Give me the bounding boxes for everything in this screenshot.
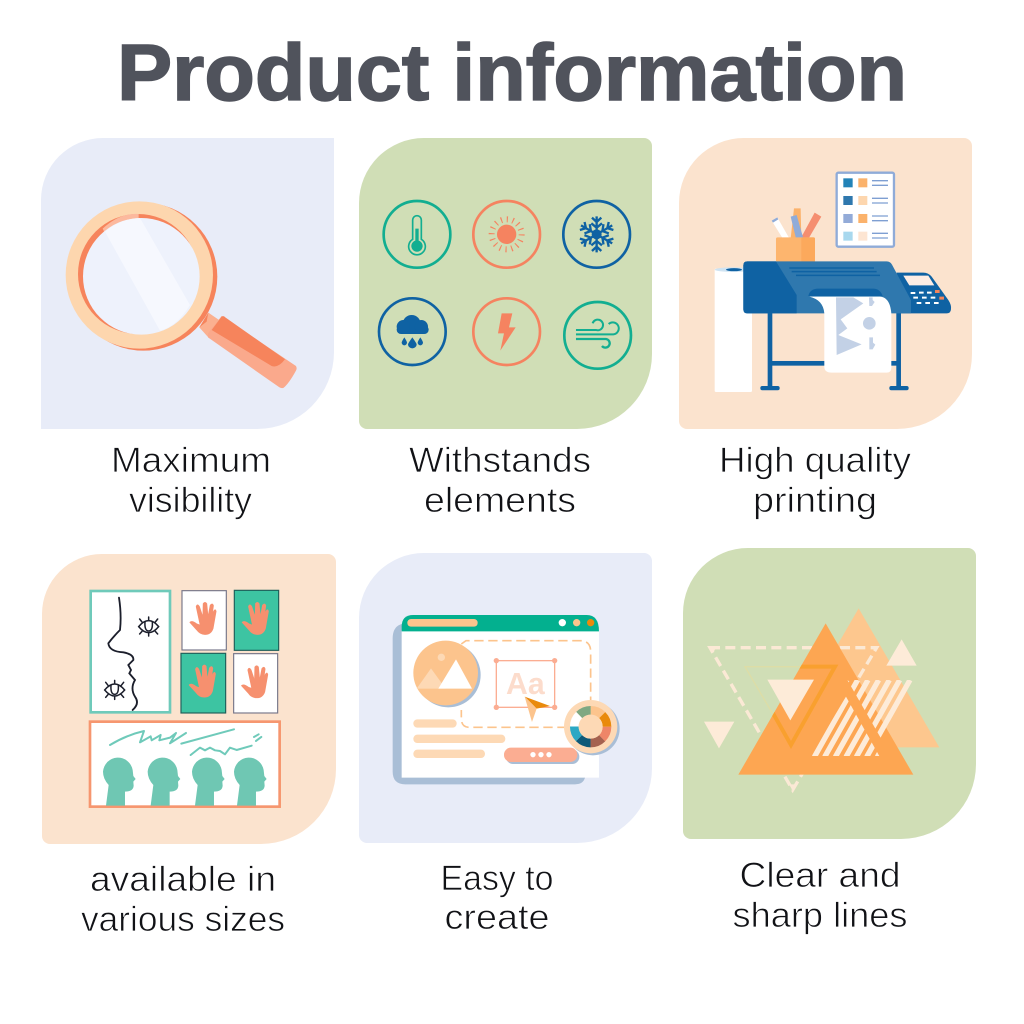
cursor xyxy=(525,697,550,722)
label: high quality printing xyxy=(719,441,912,520)
panel: available in various sizes xyxy=(42,554,336,844)
illustration: poster collection xyxy=(90,590,280,807)
label: clear and sharp lines: Clear and xyxy=(740,856,900,895)
colour wheel xyxy=(564,700,620,755)
label: easy to create xyxy=(440,859,554,937)
poster: face profile xyxy=(91,591,170,712)
panel: withstands elements xyxy=(359,138,652,429)
icon: lightning bolt xyxy=(473,298,540,365)
text lines xyxy=(413,719,505,758)
dashed triangle xyxy=(710,648,877,790)
printer stand xyxy=(760,310,909,390)
printed sheet xyxy=(809,297,891,373)
orange outline triangle xyxy=(772,664,838,749)
icon: magnifying glass xyxy=(66,201,297,388)
image thumbnail xyxy=(413,641,481,707)
label: maximum visibility xyxy=(111,441,271,520)
white dashed overlay xyxy=(840,648,877,678)
text box Aa: Aa xyxy=(506,667,546,701)
text box Aa xyxy=(494,658,557,710)
label: easy to create: Easy to xyxy=(440,859,554,898)
panel: high quality printing xyxy=(679,138,972,429)
label: maximum visibility: visibility xyxy=(129,481,253,520)
label: maximum visibility: Maximum xyxy=(111,441,271,480)
label: high quality printing: High quality xyxy=(719,441,912,480)
panel background: withstands elements xyxy=(359,138,652,429)
banner: heads xyxy=(90,722,280,807)
label: clear and sharp lines: sharp lines xyxy=(732,896,908,935)
main triangle xyxy=(738,623,913,775)
panel background: clear and sharp lines xyxy=(683,548,976,839)
label: easy to create: create xyxy=(444,898,550,937)
label: available in various sizes: various sizes xyxy=(81,900,285,939)
pencil cup xyxy=(772,208,821,262)
posters: hands xyxy=(181,590,279,713)
label: withstands elements: Withstands xyxy=(409,441,591,480)
panel background: high quality printing xyxy=(679,138,972,429)
label: high quality printing: printing xyxy=(753,481,877,520)
panel: easy to create xyxy=(359,553,652,843)
window xyxy=(393,615,599,784)
label: available in various sizes: available in xyxy=(90,860,276,899)
dashed selection xyxy=(461,641,591,727)
label: clear and sharp lines xyxy=(732,856,908,935)
paper roll xyxy=(715,267,752,392)
label: withstands elements: elements xyxy=(424,481,576,520)
icon: rain cloud xyxy=(379,298,446,365)
panel background: maximum visibility xyxy=(41,138,334,429)
icon: wind xyxy=(564,302,631,369)
illustration: wide format printer xyxy=(715,173,951,392)
printer body xyxy=(743,261,951,313)
cream triangles xyxy=(704,639,917,748)
icon: snowflake xyxy=(563,201,630,268)
panel background: easy to create xyxy=(359,553,652,843)
pale triangle xyxy=(778,608,939,747)
panel background: various sizes xyxy=(42,554,336,844)
icons: weather xyxy=(379,201,631,369)
illustration: design software window xyxy=(393,615,620,784)
stripes xyxy=(812,680,912,756)
title: Product information xyxy=(117,28,907,117)
icon: thermometer xyxy=(384,201,450,268)
label: available in various sizes xyxy=(81,860,285,939)
pale outline triangle xyxy=(745,667,835,745)
colour chart xyxy=(837,173,894,247)
icon: sun xyxy=(473,201,540,268)
panel: clear and sharp lines xyxy=(683,548,976,839)
illustration: triangles xyxy=(704,608,939,790)
label: withstands elements xyxy=(409,441,591,520)
panel: maximum visibility xyxy=(41,138,334,429)
button xyxy=(504,748,579,764)
